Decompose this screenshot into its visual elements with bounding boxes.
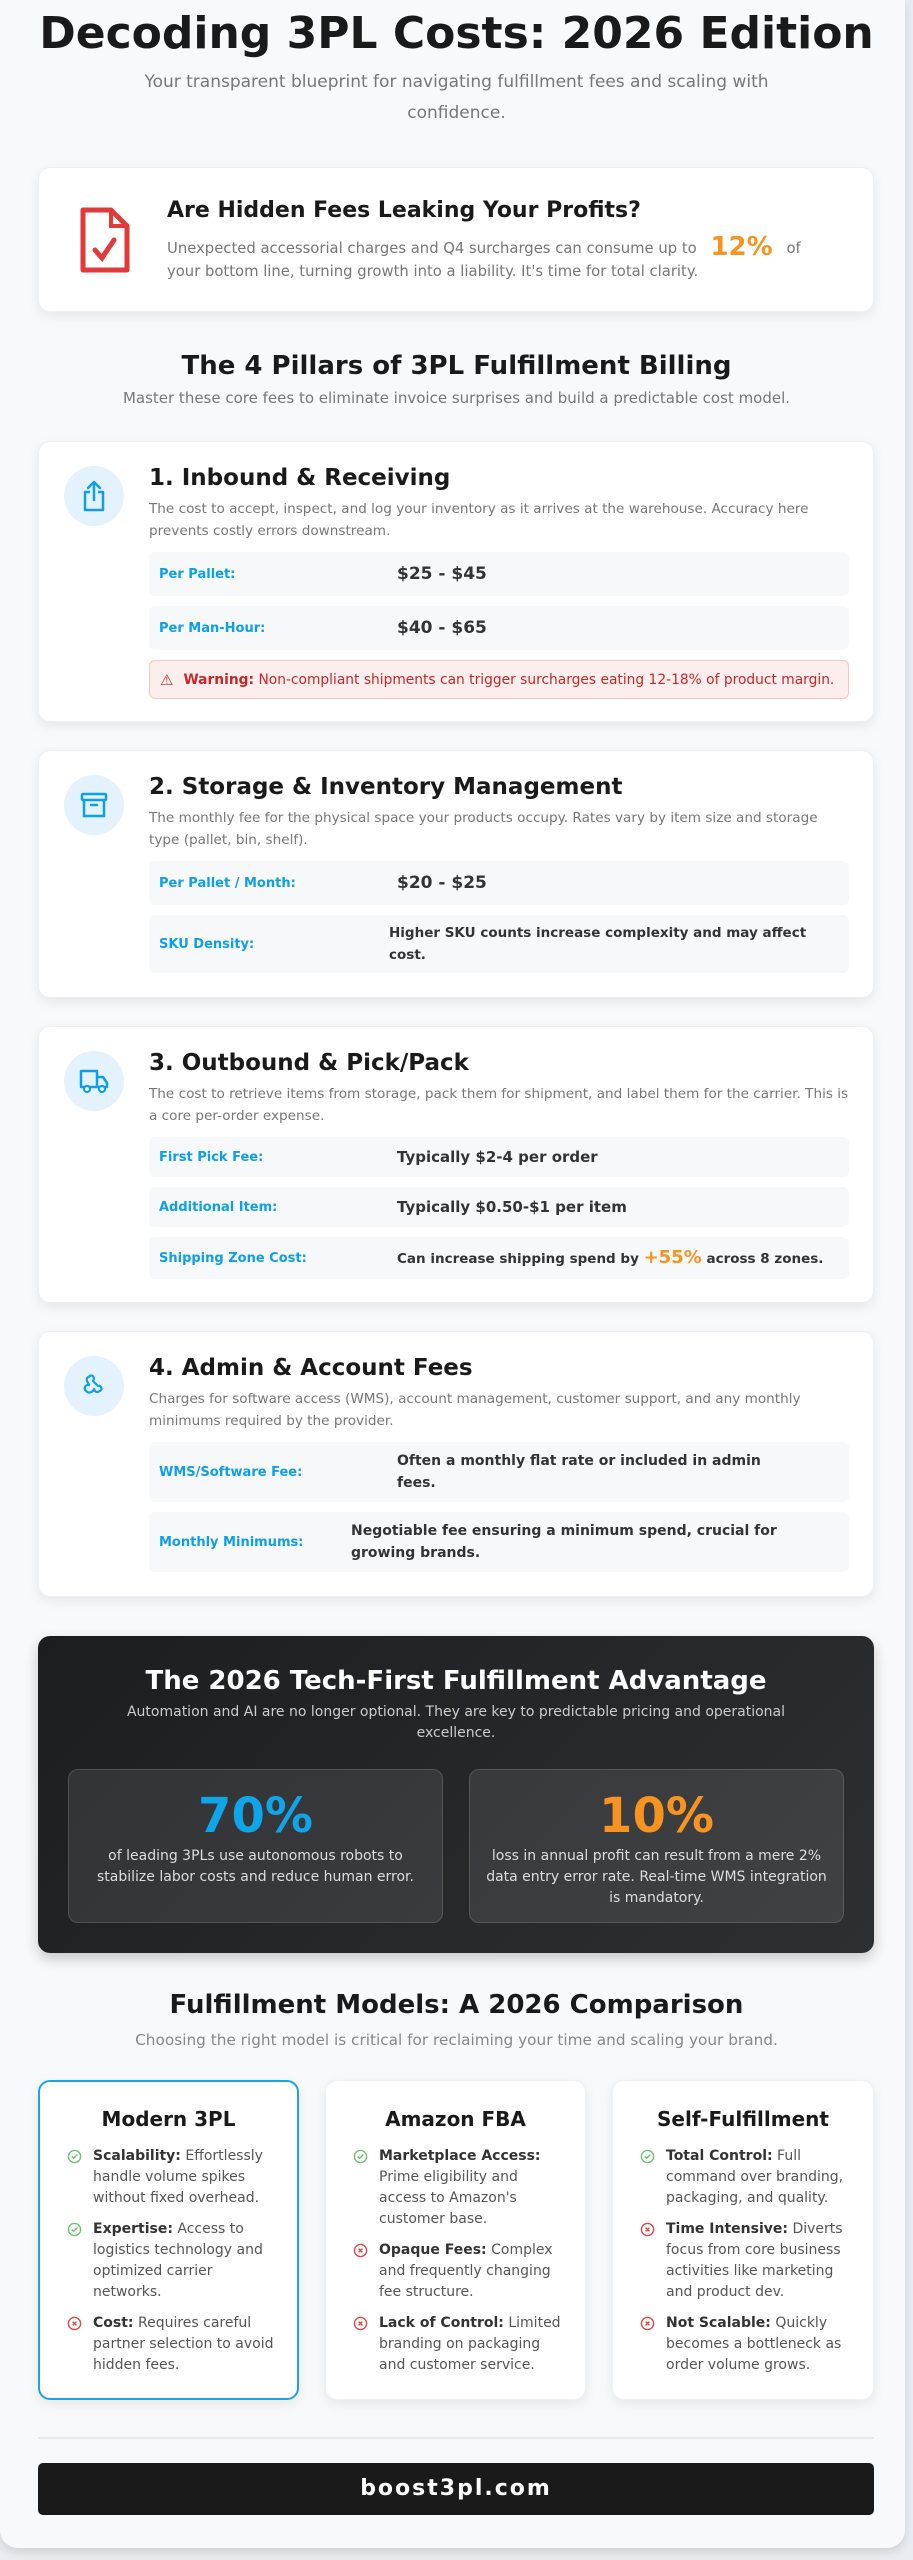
warning: ⚠ [160,670,173,688]
footer: brand bar [38,2463,874,2515]
card: amazon FBA: Lack of Control: Limited branding on packaging and customer service. [379,2315,561,2373]
card: amazon FBA [325,2080,586,2400]
subtitle: Your transparent blueprint for navigating fulfillment fees and scaling with confidence. [144,72,769,123]
panel: inbound: 1. Inbound & Receiving [149,465,450,491]
panel: admin: Charges for software access (WMS), account management, customer support, and any monthly minimums required by the provider. [149,1391,801,1429]
panel: outbound: Additional Item: [159,1200,277,1214]
panel: storage: Per Pallet / Month: [159,876,296,890]
panel: admin: WMS/Software Fee: [159,1464,302,1480]
card: modern 3PL: Cost: Requires careful partner selection to avoid hidden fees. [93,2315,274,2373]
section subheading: Master these core fees to eliminate invoice surprises and build a predictable cost model. [123,389,790,407]
card: amazon FBA: Opaque Fees: Complex and frequently changing fee structure. [379,2242,553,2300]
card: modern 3PL: Scalability: Effortlessly handle volume spikes without fixed overhead. [93,2148,263,2206]
panel: outbound: Typically $0.50-$1 per item [397,1198,627,1216]
card: amazon FBA: Amazon FBA [385,2107,526,2131]
tech heading: The 2026 Tech-First Fulfillment Advantage [145,1666,767,1696]
panel: storage: SKU Density: [159,936,254,952]
panel: storage: 2. Storage & Inventory Management [149,774,622,800]
stat: 70% [68,1769,443,1923]
warning [149,660,849,699]
panel: inbound: $25 - $45 [397,564,487,584]
card: self-fulfillment [612,2080,874,2400]
panel: outbound: Typically $2-4 per order [397,1148,598,1166]
panel: admin: Negotiable fee ensuring a minimum spend, crucial for growing brands. [351,1523,777,1561]
stat: 70%: of leading 3PLs use autonomous robots to stabilize labor costs and reduce human error. [97,1848,414,1885]
panel: outbound: 3. Outbound & Pick/Pack [149,1050,469,1076]
panel: storage: The monthly fee for the physical space your products occupy. Rates vary by item size and storage type (pallet, bin, shelf). [149,810,818,848]
panel: outbound: The cost to retrieve items from storage, pack them for shipment, and label them for the carrier. This is a core per-order expense. [149,1086,848,1124]
panel: admin: Often a monthly flat rate or included in admin fees. [397,1453,761,1491]
card: modern 3PL: Modern 3PL [102,2107,235,2131]
callout: hidden fees [38,167,874,312]
footer: brand bar: boost3pl.com [360,2476,552,2501]
icon: gear [64,1356,124,1416]
panel: outbound: Shipping Zone Cost: [159,1250,307,1266]
stat: 10%: 10% [599,1788,714,1844]
panel: inbound: The cost to accept, inspect, and log your inventory as it arrives at the warehouse. Accuracy here prevents costly errors downstream. [149,501,808,539]
warning: Non-compliant shipments can trigger surcharges eating 12-18% of product margin. [258,672,834,688]
icon: archive box [64,775,124,835]
panel: storage: $20 - $25 [397,873,487,893]
comparison subheading: Choosing the right model is critical for reclaiming your time and scaling your brand. [135,2031,778,2049]
card: self-fulfillment: Self-Fulfillment [657,2107,829,2131]
stat: 70%: 70% [198,1788,313,1844]
card: amazon FBA: Marketplace Access: Prime eligibility and access to Amazon's customer base. [379,2148,541,2227]
icon: truck [64,1051,124,1111]
panel: admin: Monthly Minimums: [159,1534,303,1550]
card: self-fulfillment: Not Scalable: Quickly becomes a bottleneck as order volume grows. [666,2315,841,2373]
panel: admin: 4. Admin & Account Fees [149,1355,473,1381]
card: self-fulfillment: Time Intensive: Diverts focus from core business activities like marketing and product dev. [666,2221,843,2300]
panel: storage: Higher SKU counts increase complexity and may affect cost. [389,925,806,963]
callout heading: Are Hidden Fees Leaking Your Profits? [167,198,641,223]
panel: outbound [38,1026,874,1303]
card: self-fulfillment: Total Control: Full command over branding, packaging, and quality. [666,2148,843,2206]
panel: tech advantage [38,1636,874,1953]
stat: 10%: loss in annual profit can result from a mere 2% data entry error rate. Real-time WMS integration is mandatory. [486,1848,827,1906]
callout text: Unexpected accessorial charges and Q4 surcharges can consume up to 12% of your bottom line, turning growth into a liability. It's time for total clarity. [167,232,801,280]
card: modern 3PL [38,2080,299,2400]
icon: upload [64,466,124,526]
panel: outbound: First Pick Fee: [159,1150,263,1164]
panel: storage [38,750,874,998]
panel: admin [38,1331,874,1597]
panel: inbound: Per Man-Hour: [159,620,265,636]
title: Decoding 3PL Costs: 2026 Edition [39,8,874,59]
section heading: comparison: Fulfillment Models: A 2026 Comparison [170,1990,743,2020]
stat: 10% [469,1769,844,1923]
section heading: pillars: The 4 Pillars of 3PL Fulfillment Billing [181,351,732,381]
card: modern 3PL: Expertise: Access to logistics technology and optimized carrier networks. [93,2221,263,2300]
icon: document check [80,208,130,272]
tech subheading: Automation and AI are no longer optional. They are key to predictable pricing and operational excellence. [127,1704,785,1741]
panel: outbound: Can increase shipping spend by +55% across 8 zones. [397,1246,823,1268]
panel: inbound: $40 - $65 [397,618,487,638]
warning: Warning: [183,672,254,688]
panel: inbound [38,441,874,722]
panel: inbound: Per Pallet: [159,566,235,582]
